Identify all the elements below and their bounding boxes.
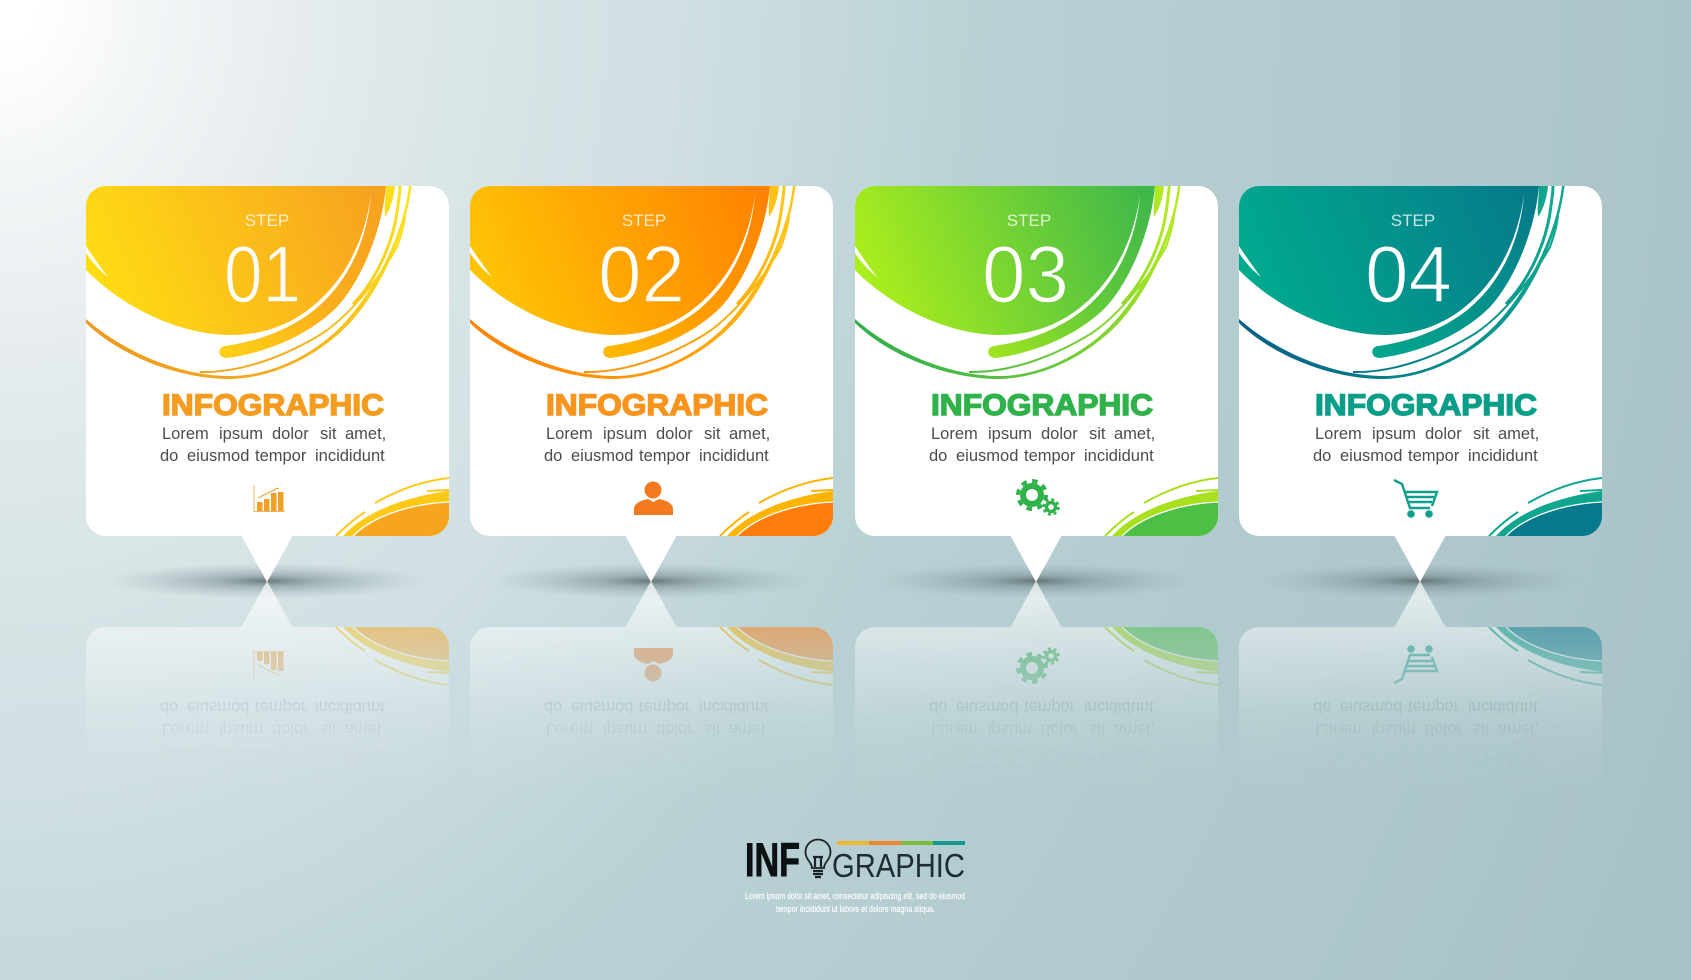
reflections of the cards: INFOGRAPHIC: [931, 741, 1153, 774]
step number 04: 04: [1365, 230, 1452, 320]
logo caption: [745, 891, 965, 914]
text block 01: [160, 425, 386, 465]
logo caption: tempor incididunt ut labore et dolore magna aliqua.: [776, 904, 935, 914]
step label 03: STEP: [1007, 211, 1051, 230]
panel: step 01: [86, 186, 449, 582]
panel: step 03: [855, 186, 1218, 582]
panel: step 02: [470, 186, 833, 582]
panel: step 04: [1239, 186, 1602, 582]
reflections of the cards: [86, 582, 1602, 732]
reflections of the cards: INFOGRAPHIC: [1315, 741, 1537, 774]
icon: shopping cart: [1394, 480, 1437, 517]
icon: person: [634, 482, 673, 515]
heading 04: INFOGRAPHIC: [1315, 389, 1537, 422]
step label 04: STEP: [1391, 211, 1435, 230]
step label 01: STEP: [245, 211, 289, 230]
logo colour bars: [837, 841, 965, 845]
step number 03: 03: [982, 230, 1069, 320]
icon: light bulb: [806, 839, 830, 877]
step number 01: 01: [224, 230, 301, 320]
icon: bar chart: [254, 485, 285, 512]
text block 02: [544, 425, 770, 465]
step label 02: STEP: [622, 211, 666, 230]
logo caption: Lorem ipsum dolor sit amet, consectetur adipiscing elit, sed do eiusmod: [745, 891, 965, 901]
heading 01: INFOGRAPHIC: [162, 389, 384, 422]
text block 03: [929, 425, 1155, 465]
reflections of the cards: INFOGRAPHIC: [546, 741, 768, 774]
footer logo: [745, 833, 965, 914]
step number 02: 02: [598, 230, 685, 320]
icon: gears: [1018, 481, 1058, 514]
reflections of the cards: INFOGRAPHIC: [162, 741, 384, 774]
heading 03: INFOGRAPHIC: [931, 389, 1153, 422]
logo word GRAPHIC: GRAPHIC: [832, 847, 965, 884]
heading 02: INFOGRAPHIC: [546, 389, 768, 422]
floor shadows: [105, 563, 1582, 599]
text block 04: [1313, 425, 1539, 465]
logo word INF: INF: [745, 833, 800, 886]
